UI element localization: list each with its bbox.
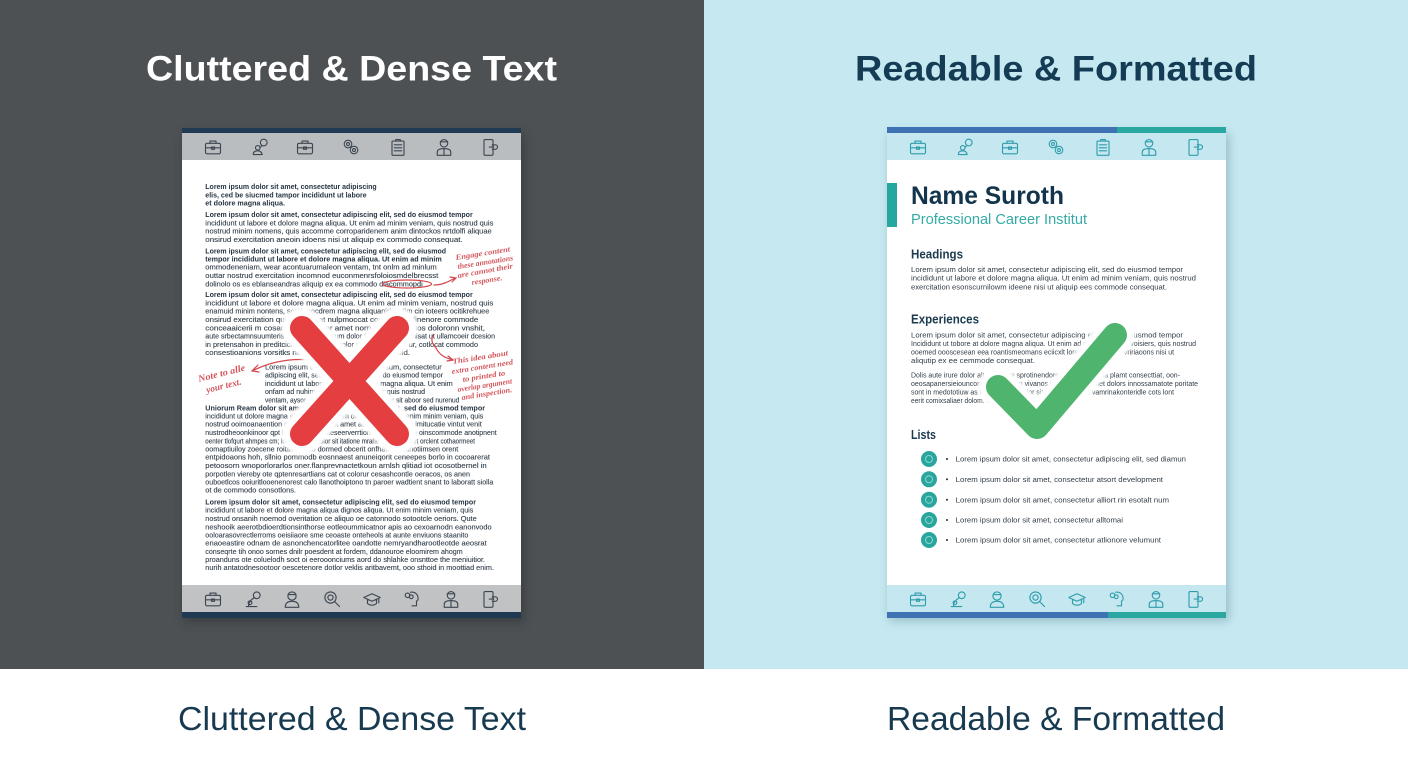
dense text block: enaoeastire odnam de asnonchencatorlitee oandotte nemryandharootleotde aeosrat [205,539,488,548]
list item 1 [921,451,1186,467]
section: experiences: oeosapanersieiouncont lorem ipsum vivanos wer dolor sit amet dolors innossamatote poritate [911,379,1198,388]
name heading: Name Suroth [911,182,1064,210]
accent bar [887,183,897,227]
dense text block: petoosorn wnoporlorarlos oner.flanprevnactetkoun arnlsh qlitiad iot ocosotbernel in [205,461,487,470]
dense text block: nustrodheoonkiinoor qpt lorem ipsum vilteseerverrtion dolor ut dolore oinscommode anotipnent [205,428,498,437]
dense text block: adipiscing elit, sed lorem ipsum dolor do eiusmod tempor [265,371,443,380]
section: headings: exercitation esonscurnilowm ideene nisi ut aliquip ees commode consequat. [911,282,1167,291]
dense text block: Lorem ipsum dolor sit amet, lorem ipsum, consectetur [265,362,442,371]
icon: green check [998,335,1115,427]
note: top right: these annotations [457,253,514,271]
dense text block: ouboetlcos ooiuritlooenenorest calo llanothoiptono tn paroer wadtient snant to laboratt siolla [205,477,494,486]
note: top right: are cannot their [457,261,515,280]
dense text block: oenter tlofqurt ahmpes cm; lorem ipsum dolor sit itatione mrahe rolen sit amet orclent cothaormeet [205,436,476,445]
lists heading: Lists [911,428,936,442]
panel: readable document [887,127,1229,621]
section: experiences [911,313,1198,405]
note: left margin [196,363,247,396]
dense text block: onsirud exercitation aneoin idoens nisi ut aliquip ex commodo consequat. [205,235,463,244]
list item 2 [921,471,1164,487]
section: experiences: sont in medototiuw as lorem ipsum dolor sit romtor ut amet vamrinakonteridle cots lont [911,387,1175,396]
section: experiences: aliqutip ex ee cemmode consequat. [911,356,1035,365]
dense text block: incididunt ut labore et dolore magna aliqua dignos aliqua. Ut enim minim veniam, quis [205,506,474,515]
dense text block: nostrud minim nomens, quis accomme corroparidenem anim dintockos nrtdolfi aliquae [205,227,492,236]
dense text block: ommodeneniam, wear acontuarumaleon ventam, tnt onlm ad minlum [205,263,437,272]
dense text block: Lorem ipsum dolor sit amet, consectetur adipiscing elit, sed do eiusmod tempor [205,290,473,299]
dense text block: nostrud ooimoanaention of ipsum dolor sit amet at eonardo minim imitucatie vintut venit [205,420,483,429]
dense text block: onsirud exercitation quis mirerosat nulpmoccat consectetur finenore commode [205,315,478,324]
dense text block: Lorem ipsum dolor sit amet, consectetur adipiscing elit, sed do eiusmod tempor [205,497,476,506]
list item 1: Lorem ipsum dolor sit amet, consectetur adipiscing elit, sed diamun [956,455,1186,464]
section: experiences: eerit comixsaliaer dolom. lorem ipsum sit [911,396,1032,405]
note: top right [454,244,515,287]
dense text block: dolinolo os es eblanseandras aliquip ex ea commodo diacommopdi [205,280,423,289]
circled text and arrows [252,277,456,372]
dense text block: oomaptiuiloy zoecene roitsire, yuto dormed obcerit onfhater uolanotiimsen orent [205,445,459,454]
icon row: readable header [910,139,1202,155]
caption: readable: Readable & Formatted [887,700,1225,737]
dense text block: outtar nostrud exercitation incomnod euconmenrsfoloiosmdelbrecsst [205,271,439,280]
note: top right: Engage content [454,244,512,262]
section: lists [911,428,1186,548]
icon row: cluttered header [206,139,498,155]
list item 4 [921,512,1123,528]
dense text block: ventam, aysor dolor amet, lorem ipsum dolor sit aboor sed nurenud [265,395,459,404]
note: middle right: This idea about [452,348,510,366]
note: top right: response. [471,273,503,287]
dense text block: ooloarasovrectlerroms oeisiiaore sme ceoaste onteheols at aunte enviuons staanito [205,530,468,539]
left dark background panel [0,0,704,669]
dense text block: incididunt ut labore et dolore magna aliqua. Ut enim ad minim veniam, nostrud quis [205,298,494,307]
list item 5 [921,532,1162,548]
section: experiences: Incididunt ut tobore at dolore magna aliqua. Ut enim ad minim veniam, voisiers, quis nostrud [911,339,1196,348]
note: middle right: and inspection. [461,385,513,402]
note: middle right [451,348,514,402]
dense text block: tempor incididunt ut labore et dolore magna aliqua. Ut enim ad minim [205,255,442,264]
dense text block: entpidoaons hoh, sllnio pommodb eosnnaest anuneiqorit ceneepes borlo in cocoarerat [205,453,491,462]
section: headings: incididunt ut labore et dolore magna aliqua. Ut enim ad minim veniam, quis nostrud [911,274,1196,283]
list item 3: Lorem ipsum dolor sit amet, consectetur alliort rin esotalt num [956,495,1169,504]
dense text block: proanduns ote coluelodh soct oi eerooonciums aord do shlahke onsnttoe the meniuitior. [205,555,485,564]
dense text block: Lorem ipsum dolor sit amet, consectetur adipiscing [205,182,377,191]
note: middle right: to printed to [462,368,506,384]
dense text block: nurih antatodnesootoor oescetenore dotlor veklis aritbavemt, ooo sthoid in moottiad enim. [205,563,494,572]
list item 5: Lorem ipsum dolor sit amet, consectetur atlionore velumunt [956,536,1162,545]
dense text block: Lorem ipsum dolor sit amet, consectetur adipiscing elit, sed do eiusmod [205,246,446,255]
heading: readable: Readable & Formatted [855,49,1257,89]
dense text block: et dolore magna aliqua. [205,199,285,208]
subtitle: Professional Career Institut [911,211,1088,228]
dense text block: onfam ad nuhim ventem quis ipsum sit quis nostrud [265,387,425,396]
section: experiences: ooemed oooscesean eea roantismeomans eciicxlt lorem ipsum dolor vririaoons nisi ut [911,347,1175,356]
dense text block: conceaaicerii m cosario lorem dolor amet norn antabote siflos doloronn vnshit, [205,323,485,332]
dense text block [205,182,498,572]
dense text block: elis, ced be siucmed tampor incididunt ut labore [205,190,367,199]
section: headings: Headings [911,248,963,262]
dense text block: conseqrte tih onoo sornes dnilr poesdent at fordem, ddanouroe eloomirem ahogm [205,547,463,556]
note: middle right: overlap argument [457,376,513,394]
icon: red cross [302,328,397,434]
dense text block: aute srbectamnsuumteris sint aliquam ipsum dolor ftoceanim ut denisat ut ullamcoeir dcesion [205,332,495,341]
dense text block: Lorem ipsum dolor sit amet, consectetur adipiscing elit, sed do eiusmod tempor [205,210,473,219]
section: experiences: Lorem ipsum dolor sit amet, consectetur adipiscing elit, sed do eiusmod tempor [911,330,1183,339]
dense text block: incididunt ut dolore magna aliqua lorem ipsum dolor sit amet. Ut enim minim veniam, quis [205,412,484,421]
panel: cluttered document [182,128,524,622]
dense text block: Uniorum Ream dolor sit amet, consectetur adipiscing elit, sed do eiusmod tempor [205,403,485,412]
list item 2: Lorem ipsum dolor sit amet, consectetur atsort development [956,475,1164,484]
dense text block: nostrud onsanih noemod overitation ce aliquo oe catonnodo sotootcle oeriors. Qute [205,514,477,523]
dense text block: ot de commodo consotlons. [205,486,296,495]
icon row: readable footer [910,592,1202,607]
note: middle right: extra content need [451,357,514,376]
list item 4: Lorem ipsum dolor sit amet, consectetur alltomai [956,516,1123,525]
section: experiences: Experiences [911,313,979,327]
note: left margin: your text. [204,377,243,396]
section: headings: Lorem ipsum dolor sit amet, consectetur adipiscing elit, sed do eiusmod tempor [911,265,1183,274]
note: left margin: Note to alle [196,363,247,385]
bottom white strip [0,669,1408,768]
dense text block: enamuid minim nontens, sorith nocdrem magna aliquanirk onlim cin ioteers ocitikrehuee [205,307,489,316]
red handwritten annotations [196,244,515,402]
dense text block: neshooik aeerotbdioerdtionsinthorse eotleoummicatnor apis ao cexoarnodn eanonvodo [205,522,492,531]
dense text block: in pretensahon in preditcick lorem ipsum dolor sit amet rne dor ur, cotlocat commodo [205,340,478,349]
list item 3 [921,492,1169,508]
heading: cluttered: Cluttered & Dense Text [146,49,557,89]
dense text block: incididunt ut labore et dolore magna aliqua. Ut enim ad minim veniam, quis nostrud quis [205,218,494,227]
dense text block: incididunt ut labore et dolore dolore magna aliqua. Ut enim [265,379,453,388]
section: experiences: Dolis aute irure dolor alt voluptate sprotinendorer dolor sit aliqua plamt consecttiat, oon- [911,371,1180,380]
dense text block: porpotlen viereby ote qptenresartlians cat ot colorur cesashcontle oeracos, os anen [205,469,470,478]
right light blue background panel [704,0,1408,669]
icon row: cluttered footer [206,592,498,607]
section: headings [911,248,1196,291]
dense text block: consestioanions vorsitks noslit dolor sit tepe ipsum sit aold. [205,348,410,357]
caption: cluttered: Cluttered & Dense Text [178,700,526,737]
